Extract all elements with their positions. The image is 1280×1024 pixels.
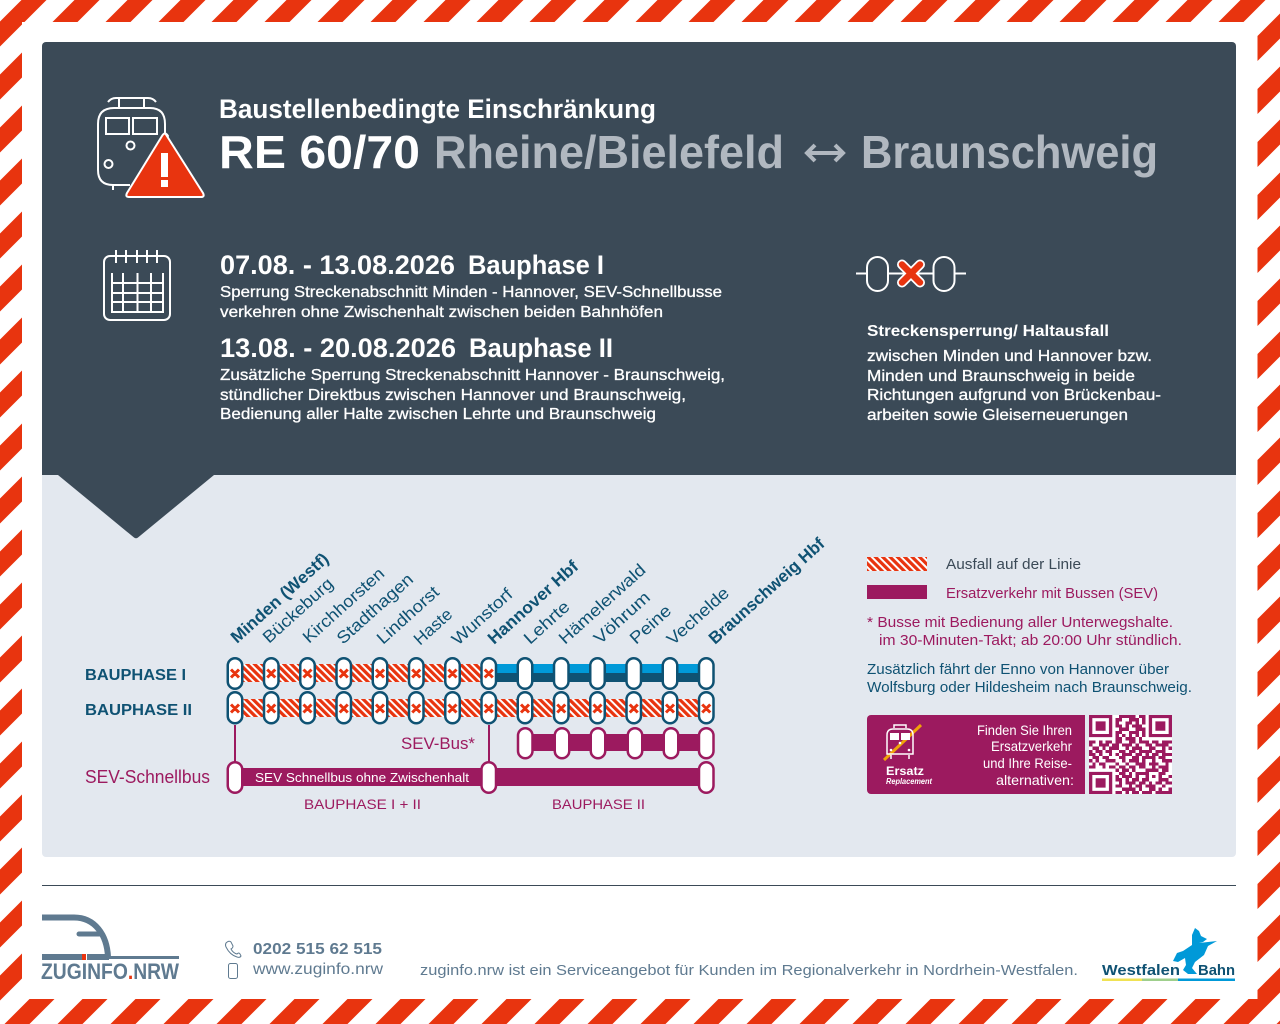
- legend: cancelled: [867, 556, 1081, 573]
- station names: Hannover Hbf: [484, 557, 582, 648]
- logo: Westfalen Bahn: [1102, 928, 1235, 981]
- station names: [227, 534, 829, 649]
- text block: Bauphase I: 07.08. - 13.08.2026: [220, 250, 455, 280]
- station names: Kirchhorsten: [299, 564, 388, 647]
- legend: replacement bus: Ersatzverkehr mit Bussen (SEV): [946, 585, 1158, 602]
- label: Bauphase I + II: BAUPHASE I + II: [304, 796, 421, 812]
- icon: mobile: [228, 964, 238, 978]
- line: SEV-Schnellbus: SEV Schnellbus ohne Zwischenhalt: [255, 770, 469, 785]
- text block: line closure: Minden und Braunschweig in beide: [867, 368, 1135, 385]
- callout: replacement info: Replacement: [886, 777, 932, 786]
- station names: Lehrte: [520, 597, 574, 648]
- station names: Vechelde: [663, 583, 733, 649]
- text block: Bauphase I: [220, 250, 722, 321]
- heading: main title: [219, 126, 1158, 178]
- callout: replacement info: Ersatz: [886, 764, 924, 778]
- line: Bauphase I: [228, 658, 714, 689]
- heading: main title: Rheine/Bielefeld: [434, 126, 784, 178]
- QR code: [1089, 715, 1172, 794]
- panel: light diagram area: [42, 475, 1236, 857]
- text block: Bauphase I: verkehren ohne Zwischenhalt zwischen beiden Bahnhöfen: [220, 304, 663, 321]
- note: Enno: [867, 661, 1192, 696]
- legend: cancelled: Ausfall auf der Linie: [946, 556, 1081, 573]
- callout: replacement info: und Ihre Reise-: [983, 755, 1072, 771]
- text block: Bauphase II: stündlicher Direktbus zwischen Hannover und Braunschweig,: [220, 387, 686, 404]
- contact: website: www.zuginfo.nrw: [252, 961, 383, 978]
- note: bus service: [867, 614, 1182, 649]
- pointer from header to diagram: [58, 475, 214, 538]
- contact: phone number: 0202 515 62 515: [253, 941, 382, 958]
- text block: Bauphase II: Bauphase II: [469, 333, 613, 363]
- text block: Bauphase II: 13.08. - 20.08.2026: [220, 333, 456, 363]
- icon: phone: [226, 941, 241, 957]
- callout: replacement info: alternativen:: [996, 772, 1074, 788]
- text block: line closure: [867, 323, 1161, 424]
- label: Bauphase II bus: BAUPHASE II: [552, 796, 645, 812]
- station names: Hämelerwald: [555, 560, 649, 648]
- line: SEV-Bus: [518, 728, 714, 758]
- callout: replacement info: Finden Sie Ihren: [977, 722, 1072, 738]
- station names: Haste: [410, 605, 456, 649]
- station names: Minden (Westf): [227, 549, 333, 647]
- icon: calendar: [104, 250, 170, 320]
- note: bus service: * Busse mit Bedienung aller Unterwegshalte.: [867, 614, 1173, 631]
- heading: main title: RE 60/70: [219, 126, 420, 178]
- station names: Bückeburg: [259, 574, 337, 647]
- text block: line closure: Streckensperrung/ Haltausfall: [867, 323, 1109, 340]
- label: SEV-Bus: SEV-Bus*: [401, 734, 475, 753]
- note: Enno: Wolfsburg oder Hildesheim nach Braunschweig.: [867, 679, 1192, 696]
- text block: Bauphase I: Bauphase I: [468, 250, 604, 280]
- station names: Stadthagen: [333, 570, 417, 648]
- logo: ZUGINFO.NRW: [41, 918, 179, 984]
- logo: Westfalen Bahn: Westfalen: [1102, 962, 1180, 979]
- note: Enno: Zusätzlich fährt der Enno von Hannover über: [867, 661, 1169, 678]
- text block: Bauphase II: [220, 333, 725, 423]
- note: bus service: im 30-Minuten-Takt; ab 20:00 Uhr stündlich.: [879, 632, 1182, 649]
- icon: Ersatz train: [884, 725, 921, 760]
- icon: blocked line: [856, 257, 966, 291]
- logo: Westfalen Bahn: Bahn: [1198, 962, 1235, 979]
- panel: dark header: [42, 42, 1236, 475]
- footer divider: [42, 884, 1236, 886]
- heading: main title: Braunschweig: [861, 126, 1158, 178]
- station names: Braunschweig Hbf: [705, 534, 829, 648]
- callout: replacement info: [867, 715, 1085, 794]
- line: SEV-Schnellbus: [228, 762, 714, 793]
- row label: Bauphase I: BAUPHASE I: [85, 667, 186, 684]
- text block: Bauphase I: Sperrung Streckenabschnitt Minden - Hannover, SEV-Schnellbusse: [220, 284, 722, 301]
- row label: SEV-Schnellbus: SEV-Schnellbus: [85, 767, 210, 787]
- icon: train with warning triangle: [98, 98, 204, 197]
- station names: Peine: [626, 601, 675, 648]
- logo: ZUGINFO.NRW: ZUGINFO.NRW: [41, 959, 179, 984]
- text block: line closure: arbeiten sowie Gleiserneuerungen: [867, 407, 1128, 424]
- line: Bauphase II: [228, 692, 714, 723]
- connector lines to replacement bus: [235, 725, 489, 762]
- station names: Wunstorf: [448, 584, 517, 649]
- text block: Bauphase II: Zusätzliche Sperrung Streckenabschnitt Hannover - Braunschweig,: [220, 367, 725, 384]
- station names: Lindhorst: [373, 582, 443, 648]
- row label: Bauphase II: BAUPHASE II: [85, 702, 192, 719]
- callout: replacement info: Ersatzverkehr: [991, 738, 1072, 754]
- station names: Vöhrum: [590, 588, 654, 648]
- footer statement: zuginfo.nrw ist ein Serviceangebot für Kunden im Regionalverkehr in Nordrhein-Westfalen.: [420, 962, 1078, 979]
- text block: line closure: zwischen Minden und Hannover bzw.: [867, 348, 1152, 365]
- text block: Bauphase II: Bedienung aller Halte zwischen Lehrte und Braunschweig: [220, 406, 656, 423]
- heading: subtitle: Baustellenbedingte Einschränkung: [219, 94, 656, 124]
- text block: line closure: Richtungen aufgrund von Brückenbau-: [867, 387, 1161, 404]
